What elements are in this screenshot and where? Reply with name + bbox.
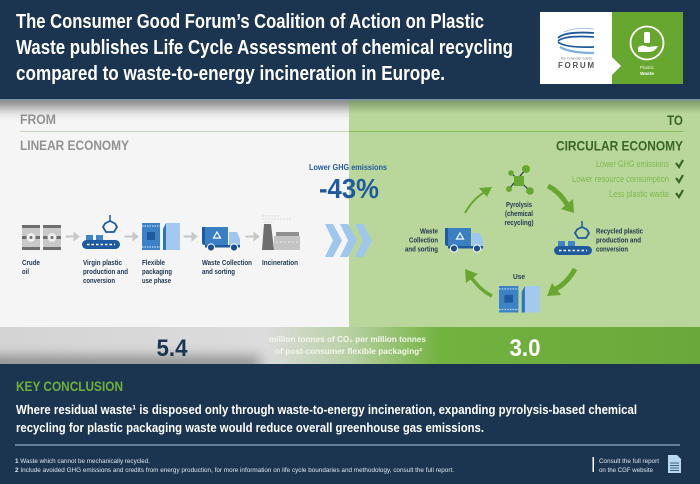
label: pyrolysis (chemical recycling): recycling) bbox=[504, 218, 534, 227]
label: waste collection and sorting: Collection bbox=[409, 236, 438, 244]
label: waste collection and sorting: and sorting bbox=[202, 267, 235, 276]
callout: lower GHG emissions -43%: -43% bbox=[319, 173, 379, 204]
label: crude oil: Crude bbox=[22, 258, 40, 267]
callout: lower GHG emissions -43% bbox=[309, 162, 387, 204]
arrow: use to collection bbox=[465, 269, 492, 296]
logo: The Consumer Goods Forum, Plastic Waste: Plastic bbox=[640, 65, 655, 71]
icon: flexible packaging bbox=[142, 223, 180, 250]
label: virgin plastic production: Virgin plastic bbox=[83, 258, 122, 267]
arrow: recycled production to use bbox=[547, 269, 575, 296]
footnotes: 1 Waste which cannot be mechanically recycled. bbox=[15, 458, 150, 465]
value: circular 3.0: 3.0 bbox=[510, 335, 540, 362]
heading: to circular economy bbox=[556, 113, 684, 154]
heading: key conclusion: KEY CONCLUSION bbox=[16, 378, 123, 394]
arrow: collection to pyrolysis bbox=[465, 187, 492, 213]
icon: collection truck bbox=[445, 228, 483, 252]
label: pyrolysis (chemical recycling) bbox=[504, 200, 534, 227]
background panel: circular economy bbox=[349, 100, 700, 330]
icon: transition chevrons bbox=[325, 224, 372, 257]
icon: document bbox=[668, 455, 681, 473]
bar caption: million tonnes: of post-consumer flexible packaging² bbox=[275, 347, 422, 356]
arrow: pyrolysis to recycled production bbox=[548, 186, 574, 213]
bar caption: million tonnes: million tonnes of CO₂ per million tonnes bbox=[269, 335, 426, 344]
label: recycled plastic production: conversion bbox=[596, 244, 628, 254]
title bbox=[16, 11, 513, 85]
label: waste collection and sorting: Waste bbox=[420, 226, 438, 236]
link: consult the full report: Consult the full report bbox=[599, 458, 659, 465]
title: Waste publishes Life Cycle Assessment of chemical recycling bbox=[16, 37, 513, 59]
label: recycled plastic production: Recycled plastic bbox=[596, 226, 643, 236]
label: virgin plastic production: conversion bbox=[83, 276, 115, 285]
footnotes bbox=[15, 458, 454, 474]
label: waste collection and sorting bbox=[405, 226, 438, 254]
conclusion body text bbox=[16, 402, 637, 435]
label: incineration: Incineration bbox=[262, 258, 298, 267]
header band bbox=[0, 0, 700, 114]
link: consult the full report: on the CGF website bbox=[599, 467, 653, 474]
label: pyrolysis (chemical recycling): (chemical bbox=[505, 209, 533, 218]
logo: The Consumer Goods Forum, Plastic Waste: The Consumer Goods bbox=[560, 56, 592, 60]
label: crude oil: oil bbox=[22, 267, 29, 276]
icon: waste collection truck bbox=[202, 227, 240, 251]
label: flexible packaging use phase: packaging bbox=[142, 267, 172, 276]
label: virgin plastic production: production and bbox=[83, 267, 128, 276]
label: waste collection and sorting: and sorting bbox=[405, 244, 438, 254]
bar caption: million tonnes bbox=[269, 335, 426, 356]
label: waste collection and sorting: Waste Collection bbox=[202, 258, 252, 267]
logo: The Consumer Goods Forum, Plastic Waste: Waste bbox=[640, 71, 654, 77]
benefit list with check marks: Less plastic waste bbox=[609, 189, 669, 199]
label: recycled plastic production bbox=[596, 226, 643, 254]
conclusion body text: recycling for plastic packaging waste would reduce overall greenhouse gas emissions. bbox=[16, 420, 484, 435]
icon: packaging in use bbox=[499, 286, 540, 312]
benefit list with check marks: Lower GHG emissions bbox=[596, 159, 669, 169]
footer rule bbox=[15, 444, 680, 446]
callout: lower GHG emissions -43%: Lower GHG emissions bbox=[309, 162, 387, 172]
arrow: flow step 2 bbox=[125, 232, 138, 240]
icon: pyrolysis molecule bbox=[506, 165, 534, 195]
arrow: flow step 1 bbox=[66, 232, 79, 240]
arrow: flow step 4 bbox=[246, 232, 259, 240]
value: linear 5.4: 5.4 bbox=[156, 335, 188, 362]
icon: incineration plant bbox=[262, 216, 300, 250]
panel: key conclusion bbox=[0, 364, 700, 484]
label: virgin plastic production bbox=[83, 258, 128, 285]
icon: oil barrels bbox=[22, 225, 61, 250]
label: flexible packaging use phase: Flexible bbox=[142, 258, 165, 267]
logo: The Consumer Goods Forum, Plastic Waste: FORUM bbox=[558, 61, 594, 70]
emissions result bar bbox=[0, 327, 700, 364]
label: flexible packaging use phase bbox=[142, 258, 172, 285]
heading: from linear economy: FROM bbox=[20, 112, 56, 127]
label: waste collection and sorting bbox=[202, 258, 252, 276]
arrow: flow step 3 bbox=[184, 232, 197, 240]
label: use: Use bbox=[513, 272, 525, 281]
label: crude oil bbox=[22, 258, 40, 276]
logo: The Consumer Goods Forum, Plastic Waste bbox=[540, 12, 683, 84]
icon: virgin plastic conveyor bbox=[82, 215, 120, 249]
title: compared to waste-to-energy incineration in Europe. bbox=[16, 63, 445, 85]
link: consult the full report bbox=[592, 457, 659, 474]
heading: from linear economy: LINEAR ECONOMY bbox=[20, 138, 129, 153]
title: The Consumer Good Forum’s Coalition of Action on Plastic bbox=[16, 11, 484, 33]
background panel: linear economy bbox=[0, 100, 700, 330]
heading: to circular economy: TO bbox=[667, 113, 683, 128]
label: recycled plastic production: production and bbox=[596, 236, 641, 244]
heading: from linear economy bbox=[20, 112, 129, 153]
divider line bbox=[20, 131, 683, 132]
benefit list with check marks: Lower resource consumption bbox=[572, 174, 669, 184]
icon: recycled plastic conveyor bbox=[554, 221, 592, 255]
label: pyrolysis (chemical recycling): Pyrolysis bbox=[506, 200, 532, 209]
benefit list with check marks bbox=[572, 159, 683, 199]
label: flexible packaging use phase: use phase bbox=[142, 276, 171, 285]
footnotes: 2 Include avoided GHG emissions and credits from energy production, for more information on life cycle boundaries and methodology, consult the full report. bbox=[15, 467, 454, 474]
